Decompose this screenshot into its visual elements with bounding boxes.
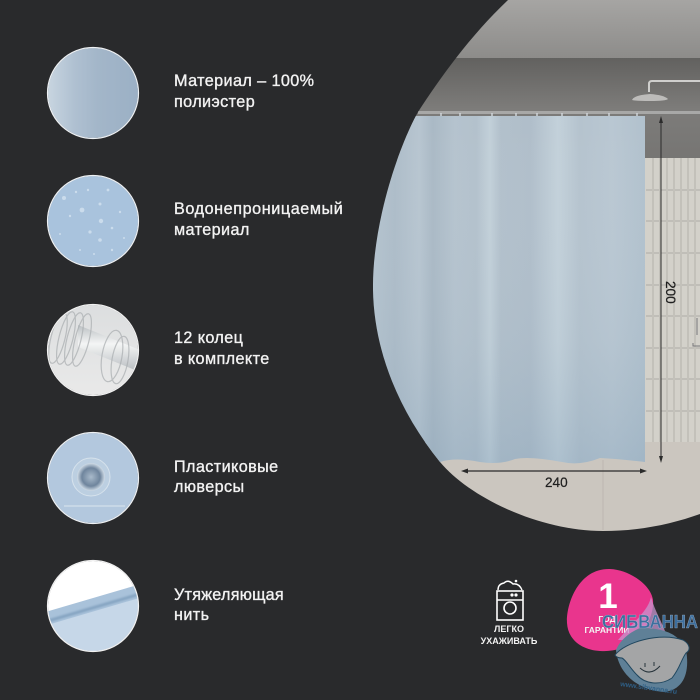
shower head: [632, 81, 700, 101]
dimension: width 240: [461, 468, 647, 488]
label: warranty: ГОД: [598, 614, 616, 624]
ceiling: [456, 0, 700, 58]
photo: bathroom with shower curtain: [360, 0, 700, 534]
label: rings: 12 колец: [174, 329, 243, 347]
watermark logo: [602, 597, 698, 696]
site url: www.sibvanna.ru: [619, 681, 677, 696]
dimension: width 240: 240: [545, 475, 568, 490]
feature: material polyester: [48, 48, 314, 138]
pink blob: [567, 569, 653, 651]
swatch: rod with rings: [45, 304, 140, 396]
icon: washing machine: [497, 580, 523, 620]
feature: weighted thread: [48, 560, 284, 660]
dimension: height 200: 200: [663, 281, 678, 304]
feature: waterproof: [48, 176, 343, 266]
swatch: weight thread: [48, 560, 140, 660]
face: [640, 662, 660, 672]
warranty badge: [567, 569, 653, 651]
drop: [618, 597, 668, 640]
label: easy care: УХАЖИВАТЬ: [481, 636, 538, 646]
label: thread: Утяжеляющая: [174, 586, 284, 604]
bathtub: [615, 637, 689, 683]
upper wall: [397, 58, 700, 160]
curtain: [373, 113, 645, 463]
dimension: height 200: [659, 116, 676, 463]
curtain rod: [418, 111, 700, 114]
feature: 12 rings: [45, 304, 270, 396]
label: waterproof: Водонепроницаемый: [174, 200, 343, 218]
tile wall: [640, 158, 700, 443]
label: thread: нить: [174, 606, 209, 624]
floor: [425, 442, 700, 531]
swatch: grommet: [48, 432, 138, 524]
label: waterproof: материал: [174, 221, 250, 239]
swatch: water drops: [48, 176, 138, 266]
label: warranty: ГАРАНТИИ: [584, 625, 630, 635]
label: easy care: ЛЕГКО: [494, 624, 524, 634]
label: material: Материал – 100%: [174, 72, 314, 90]
label: grommets: люверсы: [174, 478, 245, 496]
easy care badge: [481, 580, 538, 646]
feature: plastic grommets: [48, 432, 279, 524]
number 1: 1: [598, 577, 618, 616]
drop lower: [616, 628, 687, 692]
label: grommets: Пластиковые: [174, 458, 279, 476]
swatch: fabric: [48, 48, 138, 138]
label: material: полиэстер: [174, 93, 255, 111]
label: rings: в комплекте: [174, 350, 270, 368]
